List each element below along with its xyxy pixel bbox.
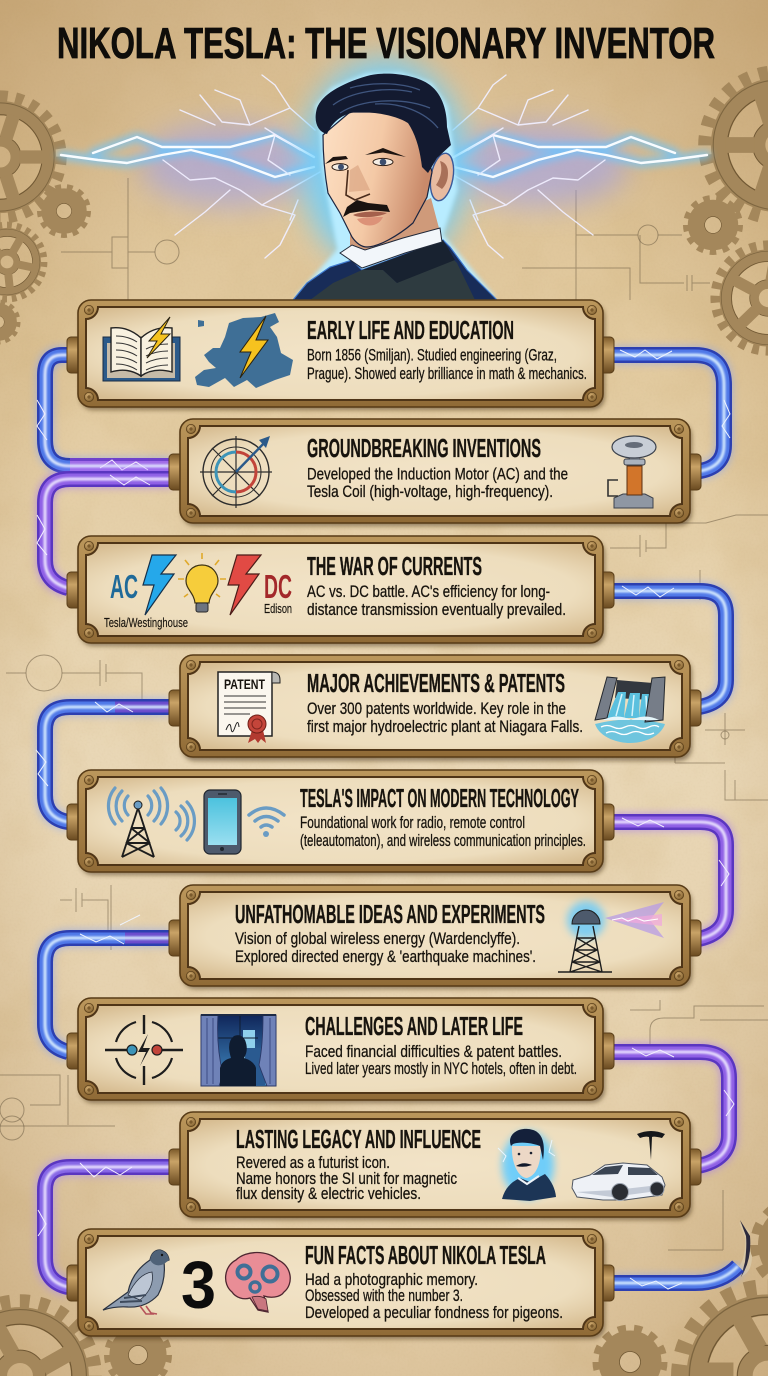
panel: fun facts about Nikola Tesla: Developed a peculiar fondness for pigeons. — [305, 1304, 563, 1322]
icon: AC versus DC with bulb — [104, 553, 292, 630]
pipe: panel 9 right to torn corner — [613, 1266, 738, 1289]
icon: Niagara dam — [595, 677, 665, 743]
face — [323, 112, 432, 247]
body text: Foundational work for radio, remote control — [300, 814, 525, 832]
panel: fun facts about Nikola Tesla — [67, 1229, 614, 1339]
panel: lasting legacy and influence — [169, 1112, 701, 1220]
pipe: panel 4 left to panel 5 left — [36, 702, 170, 822]
body text: AC vs. DC battle. AC's efficiency for long- — [307, 583, 550, 601]
panel: the war of currents: distance transmission eventually prevailed. — [307, 601, 566, 619]
icon: man at hotel window — [201, 1015, 276, 1086]
panel: lasting legacy and influence: Name honors the SI unit for magnetic — [236, 1170, 457, 1188]
heading: GROUNDBREAKING INVENTIONS — [307, 435, 541, 463]
lightning around portrait — [61, 75, 707, 258]
shirt collar — [340, 228, 442, 268]
gears: upper right cluster — [687, 72, 768, 359]
panel: major achievements and patents — [169, 655, 701, 761]
gears: lower left cluster — [0, 1301, 168, 1376]
body text: Faced financial difficulties & patent battles. — [305, 1043, 562, 1061]
icon: wifi signal — [249, 808, 284, 837]
hair — [316, 74, 451, 173]
body text: Developed the Induction Motor (AC) and the — [307, 466, 568, 484]
icon: patent certificate — [218, 672, 280, 743]
panel: Tesla's impact on modern technology — [67, 770, 614, 875]
body text: Over 300 patents worldwide. Key role in the — [307, 700, 566, 718]
heading: EARLY LIFE AND EDUCATION — [307, 317, 514, 345]
icon: white electric car — [572, 1163, 665, 1200]
eyes — [332, 164, 348, 170]
heading: UNFATHOMABLE IDEAS AND EXPERIMENTS — [235, 901, 545, 929]
icon: conflict target — [105, 1015, 183, 1085]
panel: unfathomable ideas and experiments: Explored directed energy & 'earthquake machines'. — [235, 948, 536, 966]
neck — [350, 198, 440, 262]
icon: AC versus DC with bulb: AC — [110, 568, 138, 605]
pipe: panel 1 right to panel 2 right — [613, 350, 730, 472]
pipe: panel 6 left to panel 7 left — [45, 915, 170, 1052]
pipe: panel 8 left to panel 9 left — [38, 1163, 170, 1287]
icon: pigeon — [103, 1250, 169, 1314]
pipe: panel 7 right to panel 8 right — [613, 1048, 734, 1167]
icon: radio tower — [108, 788, 168, 857]
pipe: panel 3 right to panel 4 right — [613, 586, 726, 708]
icon: Wardenclyffe tower with beam — [558, 901, 664, 972]
panel: early life and education: Prague). Showed early brilliance in math & mechanics. — [307, 365, 587, 383]
ear — [427, 151, 457, 203]
panel: lasting legacy and influence: flux density & electric vehicles. — [236, 1185, 421, 1203]
panel: groundbreaking inventions: Tesla Coil (high-voltage, high-frequency). — [307, 483, 553, 501]
panel: unfathomable ideas and experiments — [169, 885, 701, 989]
heading: MAJOR ACHIEVEMENTS & PATENTS — [307, 670, 565, 698]
panel: groundbreaking inventions — [169, 419, 701, 526]
icon: Tesla logo — [637, 1131, 665, 1160]
mouth — [353, 212, 387, 217]
heading: THE WAR OF CURRENTS — [307, 553, 482, 581]
body text: Revered as a futurist icon. — [236, 1154, 390, 1172]
icon: signal waves — [176, 802, 194, 840]
pipe: panel 1 left to panel 2 left — [37, 355, 172, 470]
portrait of Nikola Tesla — [293, 59, 497, 300]
icon: brain with gears — [226, 1252, 290, 1312]
panel: Tesla's impact on modern technology: (teleautomaton), and wireless communication principles. — [300, 832, 586, 850]
panel: fun facts about Nikola Tesla: Obsessed with the number 3. — [305, 1287, 463, 1305]
body text: Born 1856 (Smiljan). Studied engineering (Graz, — [307, 346, 557, 364]
icon: AC versus DC with bulb: DC — [264, 568, 292, 605]
heading: CHALLENGES AND LATER LIFE — [305, 1013, 523, 1041]
icon: AC versus DC with bulb: Tesla/Westinghouse — [104, 615, 188, 630]
background schematic lines — [0, 178, 768, 1250]
nose — [346, 170, 370, 200]
eyebrows — [325, 148, 406, 164]
panel: challenges and later life: Lived later years mostly in NYC hotels, often in debt. — [305, 1060, 577, 1078]
panel: the war of currents — [67, 536, 614, 646]
icon: open book with bolt — [103, 317, 180, 381]
body text: Had a photographic memory. — [305, 1271, 478, 1289]
pipe: panel 5 right to panel 6 right — [613, 818, 729, 940]
icon: smartphone — [204, 790, 241, 854]
panel: major achievements and patents: first major hydroelectric plant at Niagara Falls. — [307, 718, 583, 736]
body text: Vision of global wireless energy (Wardenclyffe). — [235, 930, 520, 948]
icon: Tesla coil — [608, 436, 656, 508]
icon: induction motor diagram — [200, 436, 272, 508]
gears: upper left cluster — [0, 96, 88, 342]
icon: patent certificate: PATENT — [224, 676, 265, 692]
icon: number three: 3 — [181, 1248, 216, 1323]
heading: LASTING LEGACY AND INFLUENCE — [236, 1126, 481, 1154]
icon: AC versus DC with bulb: Edison — [264, 601, 292, 616]
panel: early life and education — [67, 300, 614, 410]
icon: map of Europe with bolt — [195, 313, 293, 388]
gears: lower right cluster with torn corner — [597, 1201, 768, 1376]
panel: challenges and later life — [67, 998, 614, 1103]
heading: FUN FACTS ABOUT NIKOLA TESLA — [305, 1242, 546, 1270]
pipe: panel 2 left to panel 3 left — [37, 475, 172, 588]
icon: glowing Tesla portrait — [498, 1129, 556, 1201]
jacket — [293, 240, 497, 300]
mustache — [343, 200, 390, 217]
